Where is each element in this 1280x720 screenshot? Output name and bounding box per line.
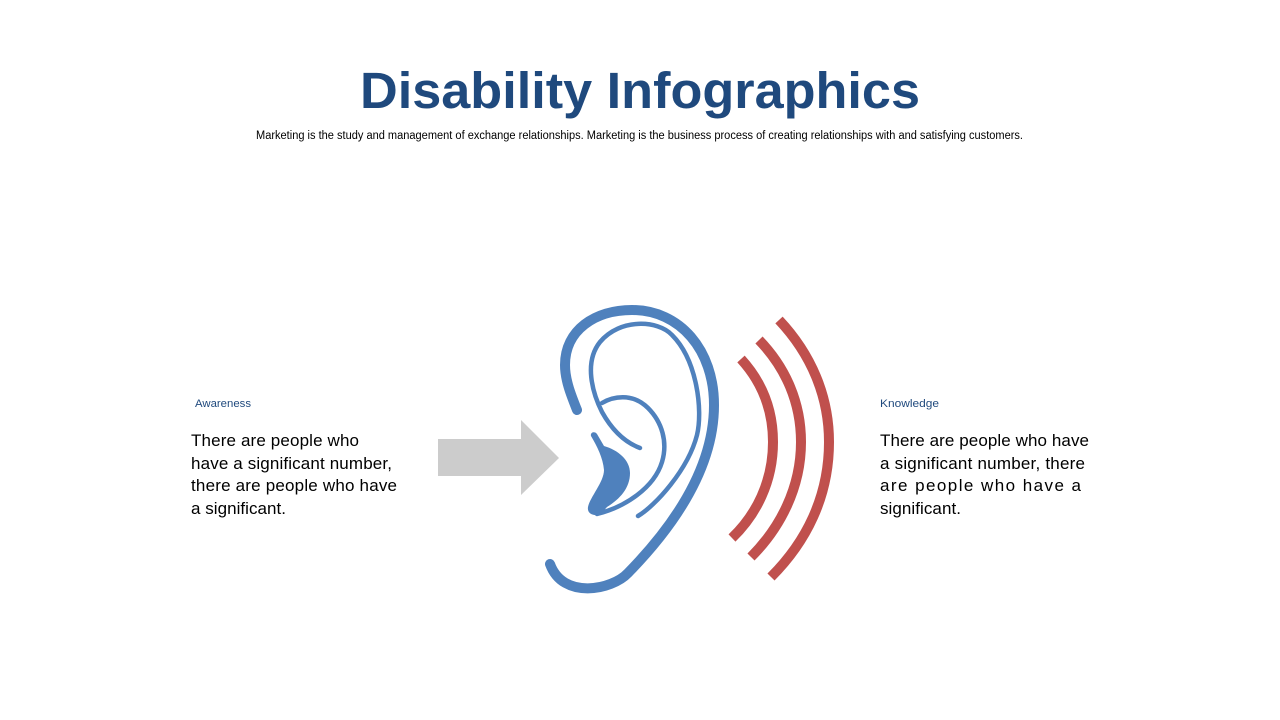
ear antihelix xyxy=(597,397,664,514)
title: Disability Infographics xyxy=(360,62,920,119)
left text block: have a significant number, xyxy=(191,454,392,473)
left text block: a significant. xyxy=(191,499,286,518)
right text block: significant. xyxy=(880,499,961,518)
right text block: a significant number, there xyxy=(880,454,1085,473)
icon: ear xyxy=(550,310,714,588)
left text block: there are people who have xyxy=(191,476,397,495)
left text block: There are people who xyxy=(191,431,359,450)
left label: Awareness: Awareness xyxy=(195,398,252,410)
right text block xyxy=(880,431,1089,518)
ear inner helix xyxy=(591,324,699,516)
ear outer contour xyxy=(550,310,714,588)
right label: Knowledge: Knowledge xyxy=(880,398,939,410)
right text block: There are people who have xyxy=(880,431,1089,450)
icon: sound waves xyxy=(732,320,829,577)
subtitle: Marketing is the study and management of exchange relationships. Marketing is the business process of creating relationships with and satisfying customers. xyxy=(256,130,1023,142)
arrow: grey pointing to ear xyxy=(438,420,559,495)
left text block xyxy=(191,431,397,518)
right text block: are people who have a xyxy=(880,476,1082,495)
ear tragus xyxy=(588,432,630,515)
